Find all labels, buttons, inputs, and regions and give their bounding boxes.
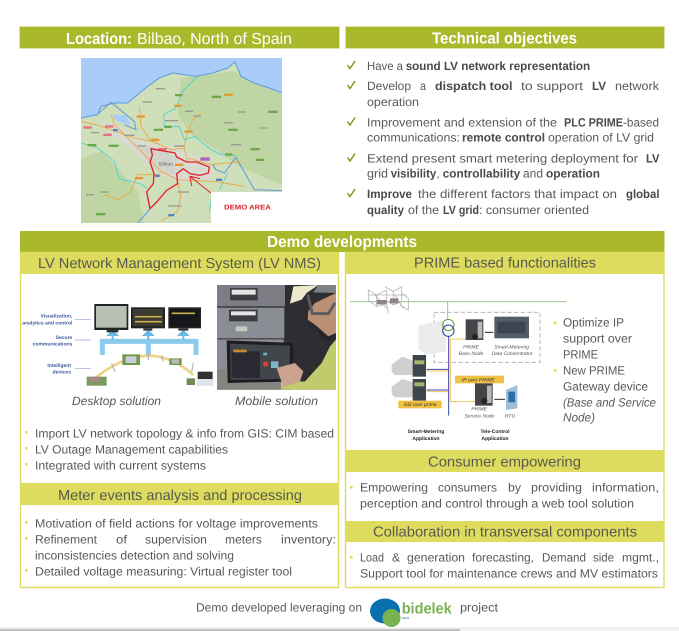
- panel: PRIME based functionalities: [345, 252, 664, 588]
- heading: location: Location:: [66, 31, 132, 48]
- objective 3: [348, 116, 659, 145]
- text block: consumer empowering: information,: [592, 481, 659, 495]
- objective 4: and: [523, 167, 543, 181]
- text block: objectives list: [348, 59, 660, 217]
- objective 4: visibility: [391, 167, 436, 181]
- text block: collaboration: Demand: [542, 551, 586, 565]
- objective 2: operation: [367, 95, 419, 109]
- diagram: PRIME network: Application: [412, 436, 440, 441]
- subheading: PRIME: PRIME based functionalities: [414, 256, 596, 272]
- objective 3: -based: [623, 116, 659, 130]
- diagram: PRIME network: Smart-Metering: [494, 344, 529, 350]
- footer: project credit: [196, 598, 499, 627]
- objective 4: [348, 152, 660, 181]
- text block: collaboration: forecasting,: [472, 551, 534, 565]
- text block: meter events items: [25, 517, 336, 579]
- text block: LV NMS features: [25, 427, 334, 473]
- text block: consumer empowering: perception and control through a web tool solution: [360, 497, 634, 511]
- objective 4: controllability: [443, 167, 521, 181]
- icon: bidelek logo: sareak: [402, 616, 409, 620]
- text block: LV NMS features: LV Outage Management capabilities: [35, 443, 228, 457]
- text block: consumer empowering: by: [508, 481, 521, 495]
- objective 2: network: [615, 79, 660, 93]
- objective 5: global: [626, 187, 660, 201]
- subheading: consumer empowering: [345, 450, 664, 472]
- objective 5: of the: [408, 203, 439, 217]
- text block: collaboration: Load: [360, 551, 384, 565]
- text block: meter events items: inconsistencies detection and solving: [35, 549, 234, 563]
- objective 2: to support: [521, 79, 584, 93]
- text block: PRIME features: PRIME: [563, 347, 598, 361]
- objective 2: a: [420, 79, 426, 93]
- objective 2: dispatch tool: [435, 79, 512, 93]
- subheading: consumer empowering: Consumer empowering: [428, 455, 581, 471]
- subheading: LV NMS: [20, 252, 339, 274]
- heading: location: [20, 26, 340, 48]
- text block: PRIME features: [554, 316, 656, 425]
- footer: project credit: Demo developed leveraging on: [196, 601, 362, 615]
- objective 5: [348, 187, 660, 217]
- heading: demo developments: [20, 231, 664, 252]
- heading: technical objectives: Technical objectives: [432, 30, 577, 48]
- objective 5: quality: [367, 203, 404, 217]
- objective 1: sound LV network representation: [406, 59, 590, 73]
- subheading: collaboration: [345, 521, 664, 542]
- objective 5: Improve: [367, 187, 412, 201]
- diagram: desktop solution: communications: [33, 341, 72, 347]
- text block: consumer empowering: [350, 481, 659, 511]
- photo: mobile solution: [217, 285, 336, 390]
- objective 3: operation of LV grid: [548, 131, 654, 145]
- objective 4: LV: [646, 152, 660, 166]
- diagram: desktop solution: Secure: [56, 335, 72, 340]
- text block: collaboration: &: [392, 551, 400, 565]
- text block: consumer empowering: Empowering: [360, 481, 428, 495]
- diagram: desktop solution: Intelligent: [47, 363, 71, 368]
- icon: bidelek logo: [370, 598, 452, 627]
- diagram: PRIME network: 432 over prime: [403, 402, 437, 407]
- caption: mobile solution: Mobile solution: [235, 394, 318, 408]
- diagram: PRIME network: [350, 287, 567, 441]
- diagram: desktop solution: devices: [53, 369, 71, 375]
- panel: LV network management system: [20, 252, 339, 588]
- objective 5: the different factors that impact on: [418, 187, 617, 201]
- objective 4: operation: [546, 167, 600, 181]
- text block: PRIME features: New PRIME: [563, 363, 625, 377]
- text block: meter events items: of: [116, 533, 128, 547]
- objective 4: grid: [367, 167, 388, 181]
- text block: collaboration: side: [593, 551, 614, 565]
- diagram: PRIME network: Application: [481, 436, 509, 441]
- subheading: meter events: Meter events analysis and processing: [58, 488, 302, 504]
- text block: LV NMS features: Integrated with current systems: [35, 459, 206, 473]
- text block: meter events items: meters: [225, 533, 262, 547]
- text block: consumer empowering: providing: [531, 481, 582, 495]
- subheading: PRIME: [345, 252, 664, 274]
- text block: PRIME features: support over: [563, 332, 632, 346]
- diagram: PRIME network: Service Node: [464, 413, 494, 419]
- objective 4: Extend present smart metering deployment for: [367, 152, 638, 166]
- caption: desktop solution: Desktop solution: [72, 394, 161, 408]
- text block: consumer empowering: consumers: [438, 481, 497, 495]
- objective 3: Improvement and extension of the: [367, 116, 557, 130]
- text block: meter events items: Detailed voltage measuring: Virtual register tool: [35, 565, 292, 579]
- icon: bidelek logo: bidelek: [402, 600, 452, 618]
- heading: demo developments: Demo developments: [267, 234, 417, 251]
- objective 2: [348, 79, 660, 109]
- diagram: desktop solution: Visualization,: [40, 313, 72, 319]
- diagram: PRIME network: Data Concentrator: [492, 351, 533, 356]
- objective 3: communications:: [367, 131, 460, 145]
- heading: technical objectives: [346, 26, 664, 48]
- objective 1: Have a: [367, 59, 403, 73]
- map: Bilbao demo area: [81, 58, 283, 224]
- objective 3: PLC PRIME: [564, 116, 623, 130]
- text block: PRIME features: Gateway device: [563, 380, 648, 394]
- diagram: PRIME network: IP over PRIME: [462, 377, 495, 383]
- diagram: PRIME network: Smart-Metering: [408, 429, 444, 434]
- text block: meter events items: inventory:: [281, 533, 336, 547]
- text block: meter events items: Refinement: [35, 533, 98, 547]
- objective 5: : consumer oriented: [479, 203, 589, 217]
- text block: meter events items: supervision: [145, 533, 207, 547]
- diagram: PRIME network: Base Node: [459, 351, 483, 356]
- text block: collaboration: Support tool for maintenance crews and MV estimators: [360, 567, 658, 581]
- text block: LV NMS features: Import LV network topology & info from GIS: CIM based: [35, 427, 334, 441]
- objective 3: remote control: [462, 131, 545, 145]
- text block: collaboration: mgmt.,: [622, 551, 659, 565]
- diagram: PRIME network: RTU: [505, 413, 515, 419]
- diagram: desktop solution: analytics and control: [22, 320, 72, 326]
- objective 4: ,: [436, 167, 440, 181]
- subheading: collaboration: Collaboration in transversal components: [373, 525, 637, 541]
- heading: location: Bilbao, North of Spain: [137, 31, 292, 48]
- text block: PRIME features: Optimize IP: [563, 316, 624, 330]
- map: Bilbao demo area: Bilbao: [159, 161, 173, 167]
- subheading: meter events: [20, 483, 339, 505]
- objective 2: LV: [592, 79, 606, 93]
- objective 2: Develop: [367, 79, 411, 93]
- objective 5: LV grid: [443, 203, 479, 217]
- diagram: desktop solution: [22, 304, 213, 386]
- map: Bilbao demo area: DEMO AREA: [224, 204, 271, 211]
- text block: collaboration: generation: [407, 551, 465, 565]
- footer: project credit: project: [460, 601, 499, 615]
- text block: PRIME features: (Base and Service: [563, 396, 656, 410]
- text block: collaboration: [350, 551, 659, 581]
- subheading: LV NMS: LV Network Management System (LV NMS): [38, 256, 321, 272]
- diagram: PRIME network: PRIME: [471, 406, 488, 412]
- text block: meter events items: Motivation of field actions for voltage improvements: [35, 517, 318, 531]
- diagram: PRIME network: PRIME: [463, 344, 479, 350]
- diagram: PRIME network: Tele-Control: [480, 429, 510, 434]
- text block: PRIME features: Node): [563, 411, 595, 425]
